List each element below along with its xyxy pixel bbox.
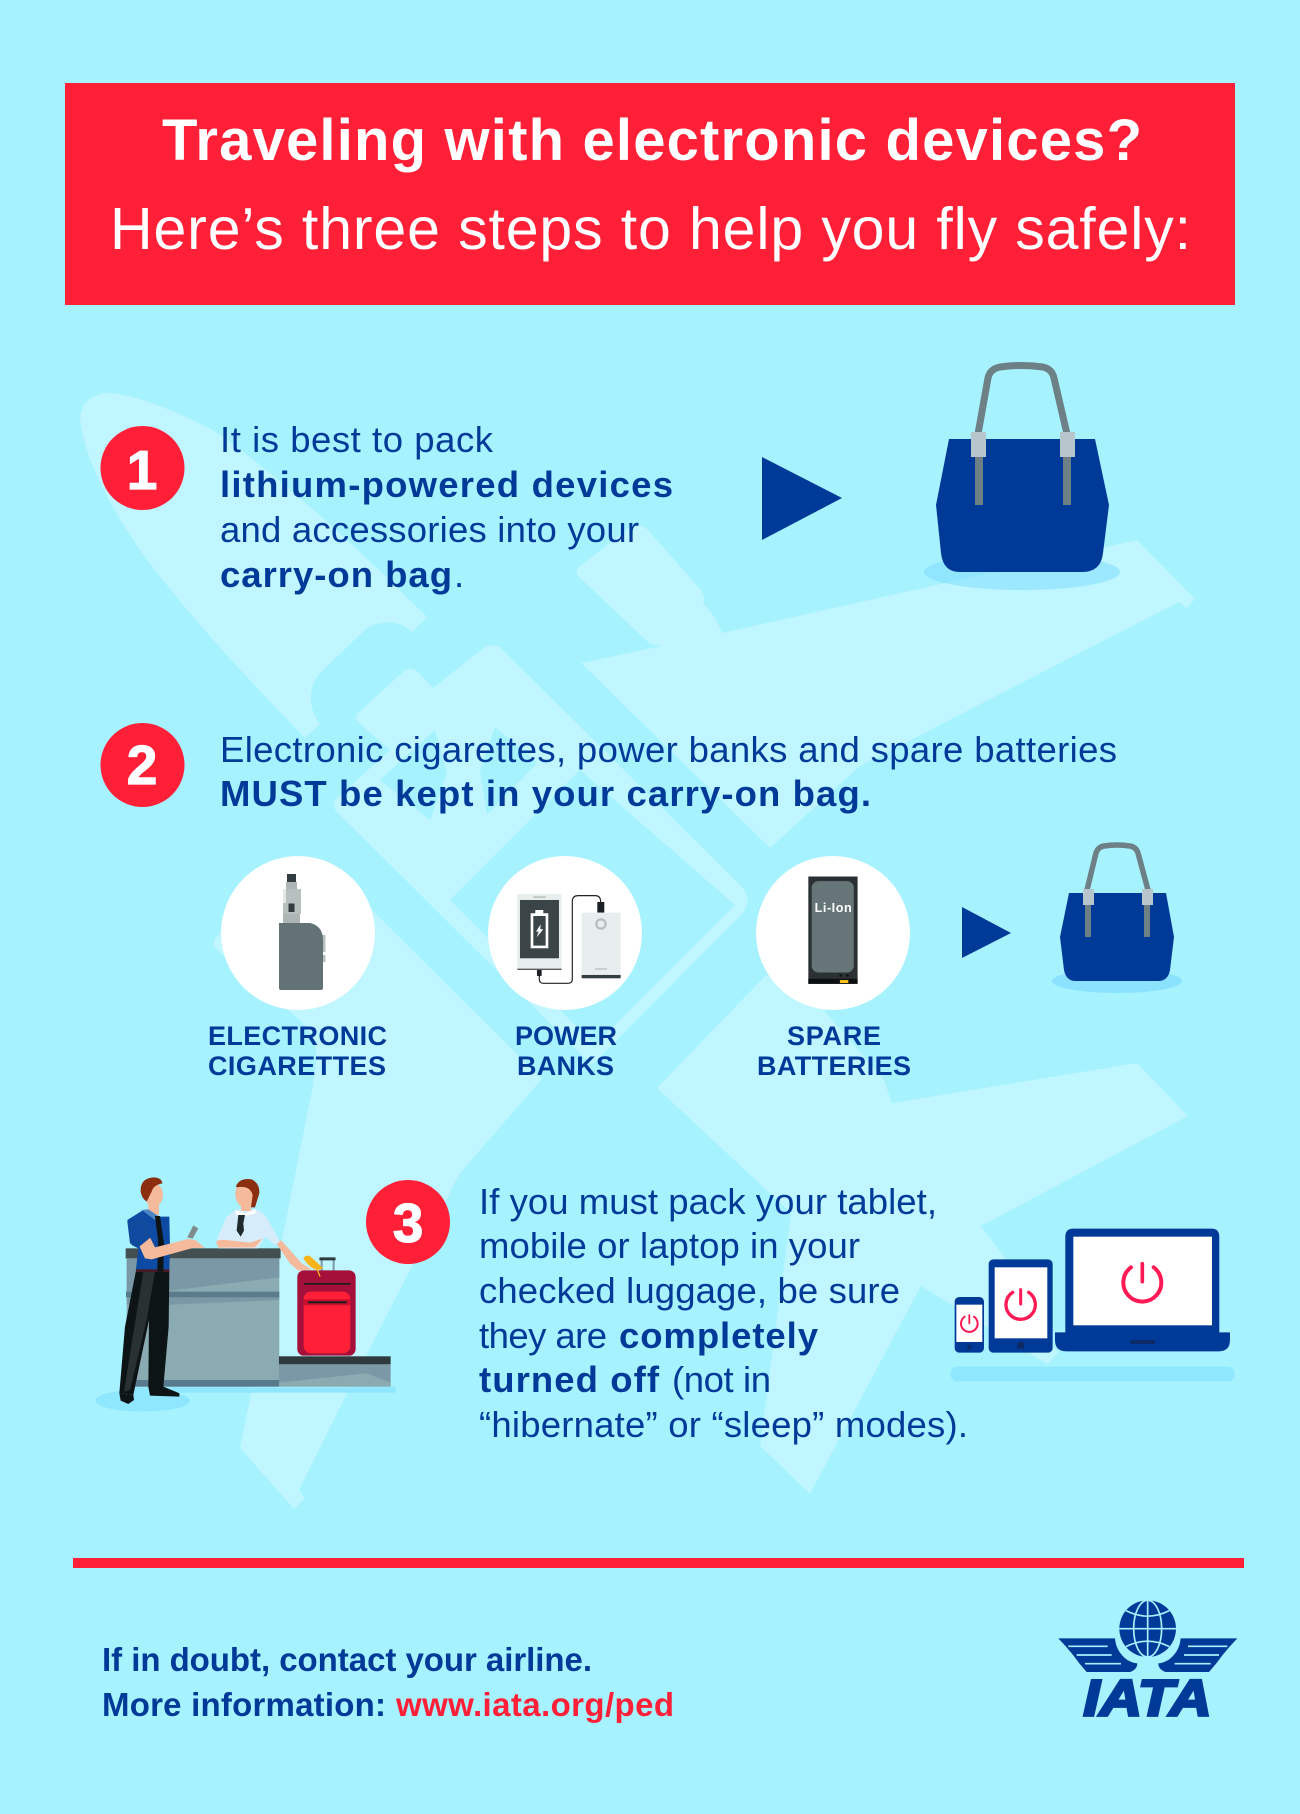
- icon: phone charging from power bank: [517, 894, 621, 983]
- title line 1: Traveling with electronic devices?: [162, 108, 1142, 173]
- footer text: If in doubt, contact your airline.: [102, 1641, 592, 1678]
- label: spare batteries: [757, 1021, 911, 1081]
- step 1 text: carry-on bag: [220, 554, 452, 595]
- background plane watermark: [80, 393, 1195, 1509]
- logo globe: [1119, 1600, 1176, 1657]
- footer text: More information:: [102, 1686, 386, 1723]
- step 2 text: Electronic cigarettes, power banks and spare batteries: [220, 729, 1117, 770]
- step 1 number badge: [100, 426, 184, 510]
- step 1 text: lithium-powered devices: [220, 464, 673, 505]
- icon: vape: [279, 874, 326, 990]
- arrow: step 2 to bag: [962, 907, 1011, 958]
- step 1 number badge: 1: [127, 439, 157, 501]
- label: electronic cigarettes: [208, 1021, 387, 1081]
- step 3 text: [479, 1181, 968, 1445]
- title banner: [65, 83, 1235, 305]
- step 3 text: turned off: [479, 1359, 660, 1400]
- step 2 number badge: [100, 723, 184, 807]
- step 3 text: (not in: [672, 1359, 771, 1400]
- step 2 number badge: 2: [127, 734, 157, 796]
- step 3 text: they are: [479, 1315, 607, 1356]
- icon: laptop: [1055, 1229, 1230, 1351]
- step 3 number badge: 3: [393, 1192, 423, 1254]
- step 3 text: completely: [619, 1315, 819, 1356]
- label: spare batteries: BATTERIES: [757, 1051, 911, 1081]
- label: power banks: BANKS: [517, 1051, 614, 1081]
- panel: spare batteries: [756, 856, 911, 1081]
- icons: phone, tablet and laptop powered off: [951, 1229, 1235, 1381]
- step 3 text: checked luggage, be sure: [479, 1270, 900, 1311]
- step 2 text: [220, 729, 1117, 814]
- icon: carry-on bag large: [924, 366, 1120, 590]
- step 3 number badge: [366, 1180, 450, 1264]
- footer divider: [73, 1558, 1244, 1568]
- step 3 text: “hibernate” or “sleep” modes).: [479, 1404, 968, 1445]
- icon: Li-Ion battery: Li-Ion: [815, 901, 852, 915]
- arrow: step 1 to bag: [762, 457, 842, 540]
- label: power banks: [515, 1021, 617, 1081]
- step 3 text: mobile or laptop in your: [479, 1225, 860, 1266]
- icon: carry-on bag small: [1052, 845, 1182, 993]
- illustration: airport check-in desk: [95, 1177, 396, 1412]
- logo wings: [1058, 1638, 1237, 1672]
- label: spare batteries: SPARE: [787, 1021, 881, 1051]
- icon: phone: [955, 1297, 984, 1353]
- IATA logo: [1058, 1600, 1237, 1727]
- label: power banks: POWER: [515, 1021, 617, 1051]
- step 1 text: .: [454, 554, 464, 595]
- step 1 text: It is best to pack: [220, 419, 494, 460]
- step 2 text: MUST be kept in your carry-on bag.: [220, 773, 871, 814]
- footer text: [102, 1641, 674, 1723]
- logo wordmark: IATA: [1083, 1670, 1212, 1727]
- label: electronic cigarettes: CIGARETTES: [208, 1051, 386, 1081]
- footer text: www.iata.org/ped: [395, 1686, 674, 1723]
- label: electronic cigarettes: ELECTRONIC: [208, 1021, 387, 1051]
- panel: power banks: [488, 856, 642, 1081]
- panel: electronic cigarettes: [208, 856, 387, 1081]
- step 1 text: [220, 419, 673, 595]
- step 1 text: and accessories into your: [220, 509, 639, 550]
- step 3 text: If you must pack your tablet,: [479, 1181, 937, 1222]
- title line 2: Here’s three steps to help you fly safely:: [110, 196, 1191, 262]
- icon: tablet: [989, 1259, 1053, 1353]
- icon: Li-Ion battery: [808, 877, 858, 984]
